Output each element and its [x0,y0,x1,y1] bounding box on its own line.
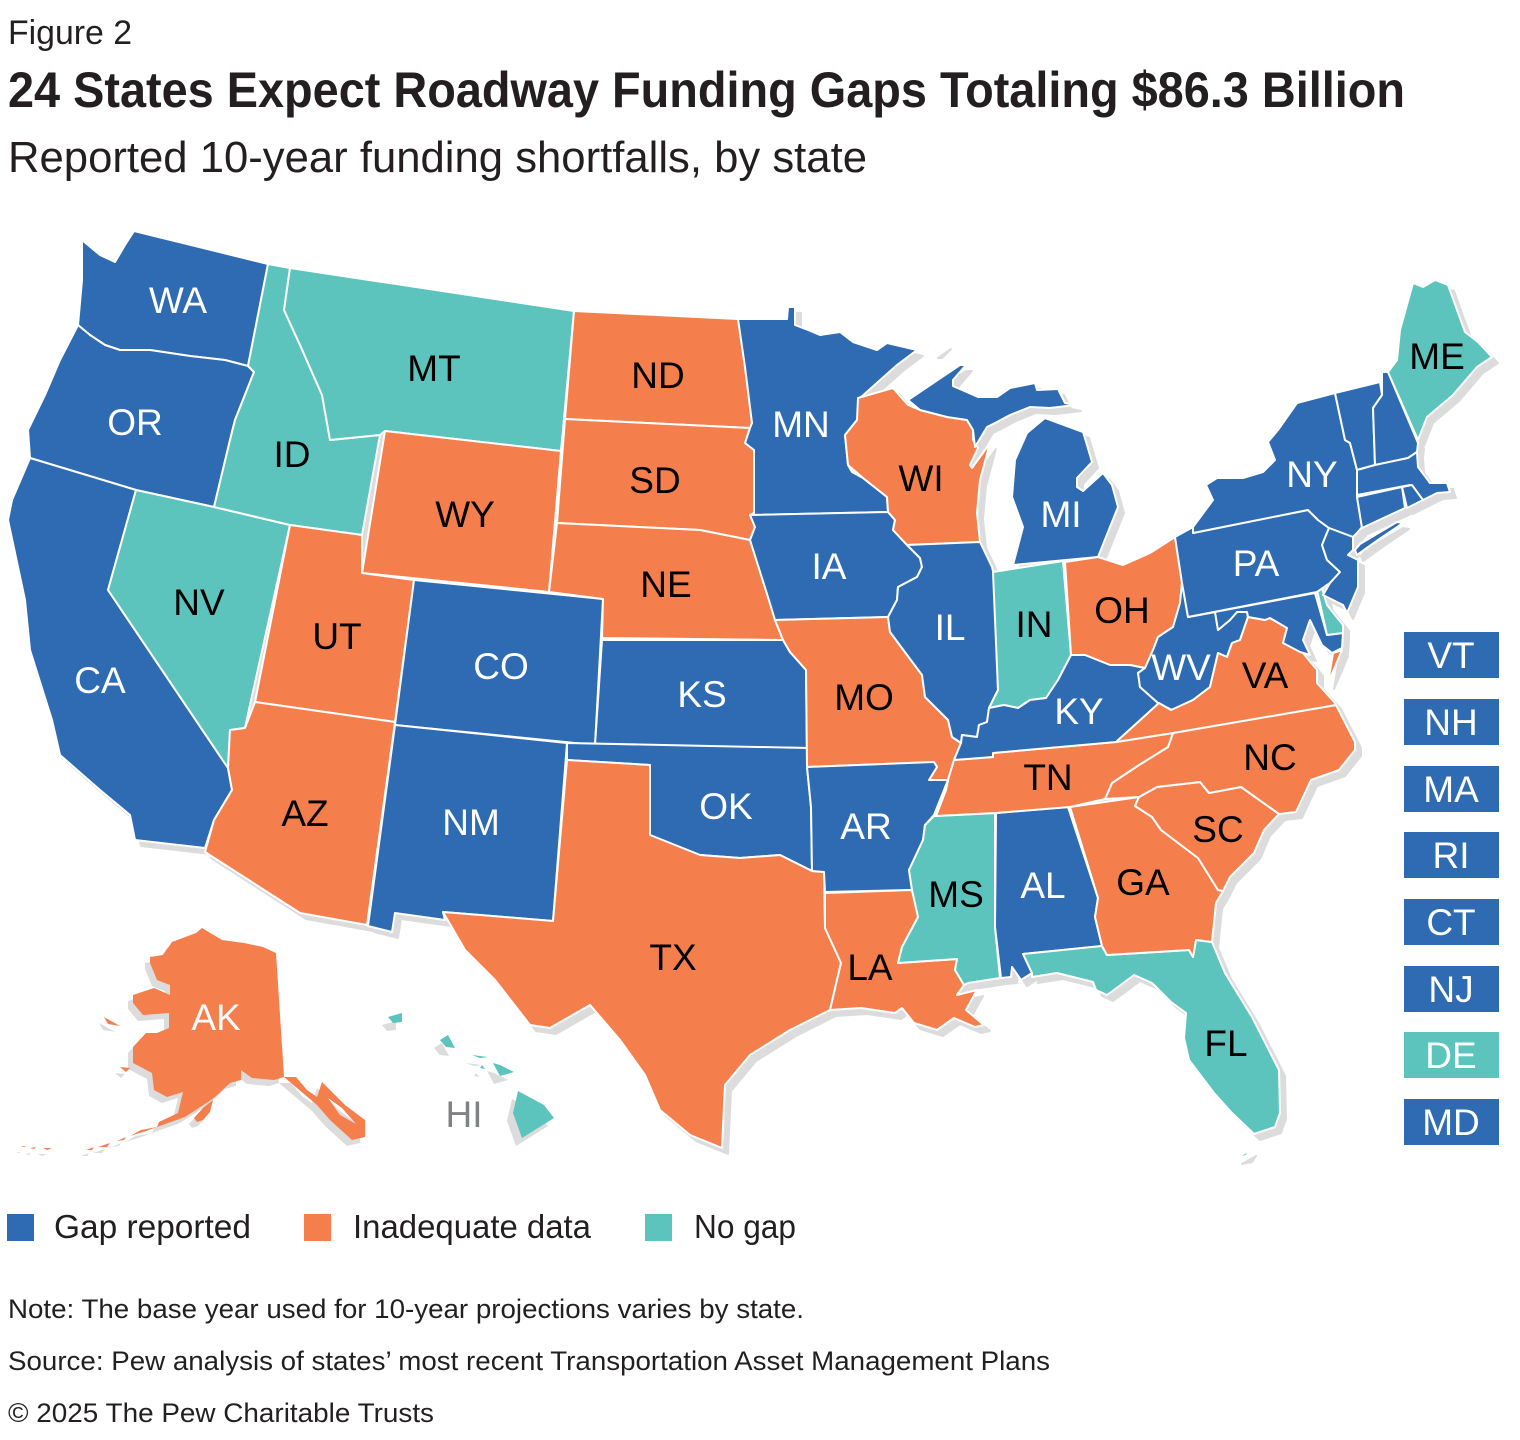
box: MA [1404,766,1499,812]
small-state key boxes [1404,632,1499,1145]
note: Note: The base year used for 10-year projections varies by state. [8,1294,804,1324]
source: Source: Pew analysis of states’ most recent Transportation Asset Management Plans [8,1346,1050,1376]
state: WA [78,231,268,366]
state: FL [1023,940,1280,1134]
state labels: MI [1040,494,1082,535]
state: VA [1116,617,1336,742]
box: DE: DE [1425,1035,1477,1076]
state labels: WI [898,458,944,499]
box: DE [1404,1032,1499,1078]
legend: inadequate data: Inadequate data [353,1208,592,1245]
state labels [74,280,1465,1135]
state labels: OK [699,786,753,827]
Alaska panhandle [284,1077,365,1140]
state labels: IA [812,546,847,587]
state: MD [1188,593,1343,655]
box: CT [1404,899,1499,945]
state labels: AK [191,997,241,1038]
map: Hawaii [388,1013,554,1138]
state: NV [108,490,290,768]
state: TN [936,733,1173,816]
state labels: SC [1192,809,1244,850]
state labels: AR [840,806,892,847]
state: OK [567,743,812,871]
Alaska mainland [133,928,284,1127]
Alaska peninsula tip [130,1127,157,1136]
state: WI [845,388,990,545]
state labels: TX [649,937,697,978]
state labels: LA [847,947,893,988]
subtitle: Reported 10-year funding shortfalls, by state [8,133,867,182]
state: MI lower peninsula [1012,418,1118,565]
state labels: WY [435,494,495,535]
state: MA [1357,452,1450,500]
box: NH [1404,699,1499,745]
state: AZ [205,702,395,925]
box: NJ [1404,966,1499,1012]
legend [7,1208,796,1245]
state: IA [750,512,922,620]
state labels: CA [74,660,126,701]
state: MI upper peninsula [908,365,1075,447]
state: VT [1335,382,1382,470]
state: MO [775,617,961,780]
Nunivak island [120,1067,130,1072]
state: CT [1357,487,1405,528]
Kodiak island [194,1100,213,1122]
state: SC [1135,782,1279,891]
state: UT [255,525,414,722]
box: MA: MA [1423,769,1479,810]
state: GA [1070,797,1223,957]
state labels: AZ [281,793,329,834]
state: NJ [1322,528,1358,613]
state labels: KS [677,674,727,715]
state: CO [395,580,603,745]
box: VT [1404,632,1499,678]
state: MT [284,268,574,451]
state: ND [565,311,752,428]
state labels: MT [407,348,461,389]
state labels: ND [631,355,685,396]
state: KY [954,655,1159,760]
Virginia eastern shore [1328,650,1342,683]
state labels: CO [473,646,529,687]
state: ME [1388,280,1492,440]
state labels: NC [1243,737,1297,778]
state labels: NV [173,582,225,623]
box: MD [1404,1099,1499,1145]
state: OH [1065,537,1182,668]
Oahu [440,1035,455,1048]
state labels: KY [1054,691,1104,732]
state labels: UT [312,616,362,657]
state labels: IN [1016,604,1052,645]
state labels: ID [274,434,310,475]
state labels: TN [1023,757,1073,798]
box: RI: RI [1432,835,1470,876]
state: ID [214,264,380,535]
state: DE [1317,588,1343,635]
Florida Keys [1236,1150,1250,1158]
box: VT: VT [1427,635,1475,676]
state labels: VA [1242,655,1289,696]
state labels: ME [1409,336,1465,377]
box: RI [1404,832,1499,878]
map: contiguous states [8,231,1492,1158]
box: NH: NH [1424,702,1478,743]
state labels: FL [1204,1023,1248,1064]
state: TX [443,760,841,1148]
Molokai [472,1055,488,1058]
state: WV [1138,583,1248,710]
Kauai [388,1013,402,1023]
state labels: NY [1286,454,1338,495]
copyright: © 2025 The Pew Charitable Trusts [8,1398,434,1428]
Lanai [480,1065,485,1069]
state: IN [989,561,1071,708]
state: CA [8,458,232,848]
state labels: HI [446,1094,482,1135]
legend: no gap: No gap [694,1208,796,1245]
state: AL [995,807,1102,980]
state: OR [28,325,254,507]
state: RI [1402,485,1423,508]
state labels: PA [1233,543,1280,584]
state labels: AL [1020,865,1066,906]
Big Island [513,1091,554,1138]
state labels: OH [1094,590,1150,631]
state labels: WA [149,280,207,321]
state labels: IL [935,607,965,648]
state labels: MS [928,874,984,915]
state: NH [1373,372,1418,465]
box: CT: CT [1426,902,1476,943]
Isle Royale [932,343,945,352]
state labels: MN [772,404,830,445]
state labels: WV [1151,647,1211,688]
state: PA [1175,510,1340,617]
state: NY [1193,393,1362,537]
state labels: NM [442,802,500,843]
state labels: MO [834,677,894,718]
state: NM [368,725,567,932]
state: WY [362,431,561,592]
state: SD [557,419,755,540]
St Lawrence island [104,1017,120,1026]
state: NE [549,523,783,640]
state: LA [825,890,984,1030]
figure number: Figure 2 [8,14,132,52]
Aleutian islands [21,1137,126,1150]
state labels: SD [629,460,681,501]
Maui [493,1063,514,1076]
state labels: OR [107,402,163,443]
Long Island [1355,522,1403,555]
box: MD: MD [1422,1102,1480,1143]
state: KS [595,640,807,748]
state labels: NE [640,564,692,605]
map: Alaska [21,928,365,1150]
legend: gap reported: Gap reported [54,1208,251,1245]
title: 24 States Expect Roadway Funding Gaps Totaling $86.3 Billion [8,62,1405,118]
legend: no gap [645,1208,796,1245]
state: NC [1105,705,1355,814]
state labels: GA [1116,862,1170,903]
state: AR [807,762,948,892]
notes and source [8,1294,1050,1428]
state: MN [738,307,917,515]
state: MS [898,813,1000,985]
state: IL [888,542,998,743]
box: NJ: NJ [1428,969,1474,1010]
